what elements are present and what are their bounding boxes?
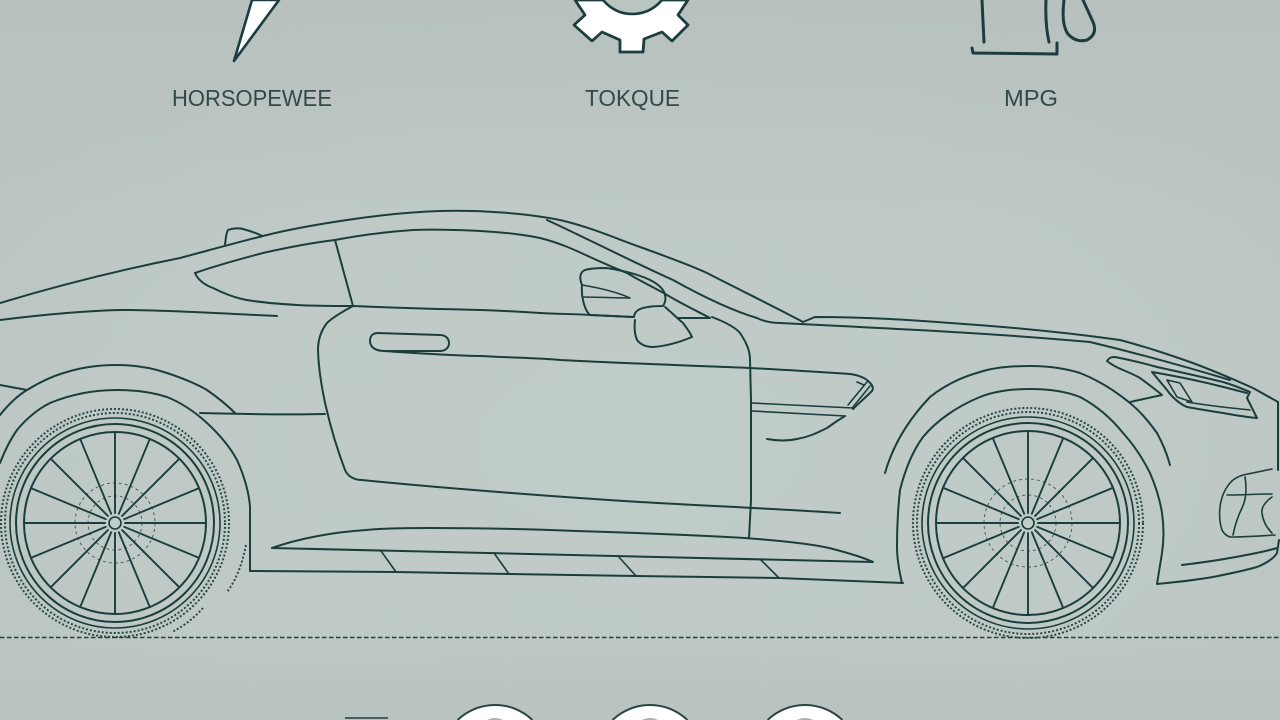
dashed ground line xyxy=(0,636,1280,638)
door pillar xyxy=(335,240,353,306)
body sill and bottom edge xyxy=(250,571,903,583)
front wheel xyxy=(913,408,1143,638)
rear character line xyxy=(0,310,277,320)
rear wheel xyxy=(1,409,246,637)
brake disc details xyxy=(984,479,1072,567)
icon: fuel pump xyxy=(972,0,1095,54)
hub xyxy=(1022,517,1034,529)
front grille xyxy=(1220,469,1275,537)
bottom circle 1 xyxy=(458,705,532,720)
spokes xyxy=(936,431,1120,615)
door handle xyxy=(370,333,449,351)
side mirror xyxy=(580,268,665,317)
tyre motion dashes xyxy=(172,545,246,632)
windshield inner line and hood crease xyxy=(547,220,1230,380)
label: torque: TOKQUE xyxy=(585,85,680,111)
bottom circle 3 xyxy=(768,705,842,720)
rim xyxy=(16,424,214,622)
rim xyxy=(928,423,1128,623)
roof and windshield outer line xyxy=(0,211,1278,402)
tyre tread xyxy=(913,408,1143,638)
hub xyxy=(109,517,121,529)
label: mpg: MPG xyxy=(1004,85,1058,111)
shoulder line and side vent xyxy=(383,351,873,409)
brake disc details xyxy=(75,483,155,563)
spokes xyxy=(24,432,206,614)
icon: torque gear xyxy=(574,0,688,52)
bottom circle 2 xyxy=(613,705,687,720)
car outline drawing xyxy=(0,211,1279,638)
front wheel arch xyxy=(885,366,1170,473)
door outline xyxy=(712,317,751,538)
rear wheel arch xyxy=(0,390,250,571)
side window xyxy=(195,230,710,318)
front bumper edge xyxy=(1277,402,1279,470)
icon: horsepower lightning bolt xyxy=(234,0,279,61)
tyre tread xyxy=(1,409,229,637)
bottom row of cropped icons xyxy=(345,705,842,720)
spoiler tab xyxy=(225,228,262,244)
label: horsepower: HORSOPEWEE xyxy=(172,85,332,111)
headlight xyxy=(1107,357,1257,418)
bottom bar icon xyxy=(345,717,388,719)
